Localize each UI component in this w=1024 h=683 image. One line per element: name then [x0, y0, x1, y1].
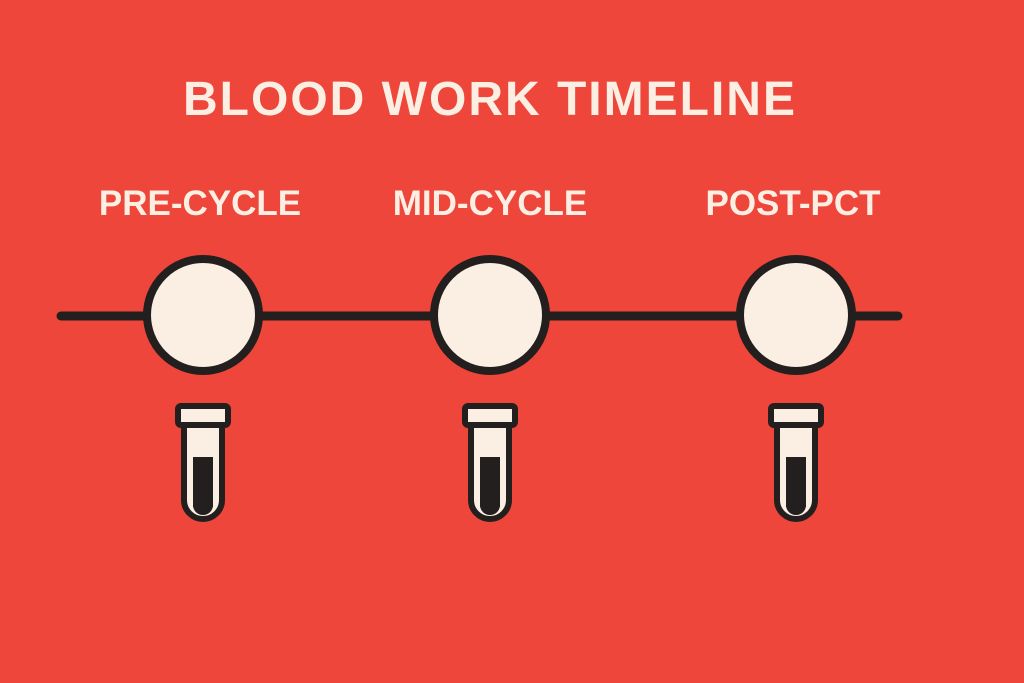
circle: pre-cycle: [147, 259, 259, 371]
label: mid-cycle: MID-CYCLE: [393, 184, 587, 223]
circle: mid-cycle: [434, 259, 546, 371]
title: BLOOD WORK TIMELINE: [183, 73, 797, 126]
icon: test tube 2: [465, 406, 515, 519]
icon: test tube 1: [178, 406, 228, 519]
icon: test tube 3: [771, 406, 821, 519]
label: pre-cycle: PRE-CYCLE: [99, 184, 301, 223]
timeline line: [61, 312, 898, 320]
circle: post-pct: [740, 259, 852, 371]
label: post-pct: POST-PCT: [705, 184, 881, 223]
